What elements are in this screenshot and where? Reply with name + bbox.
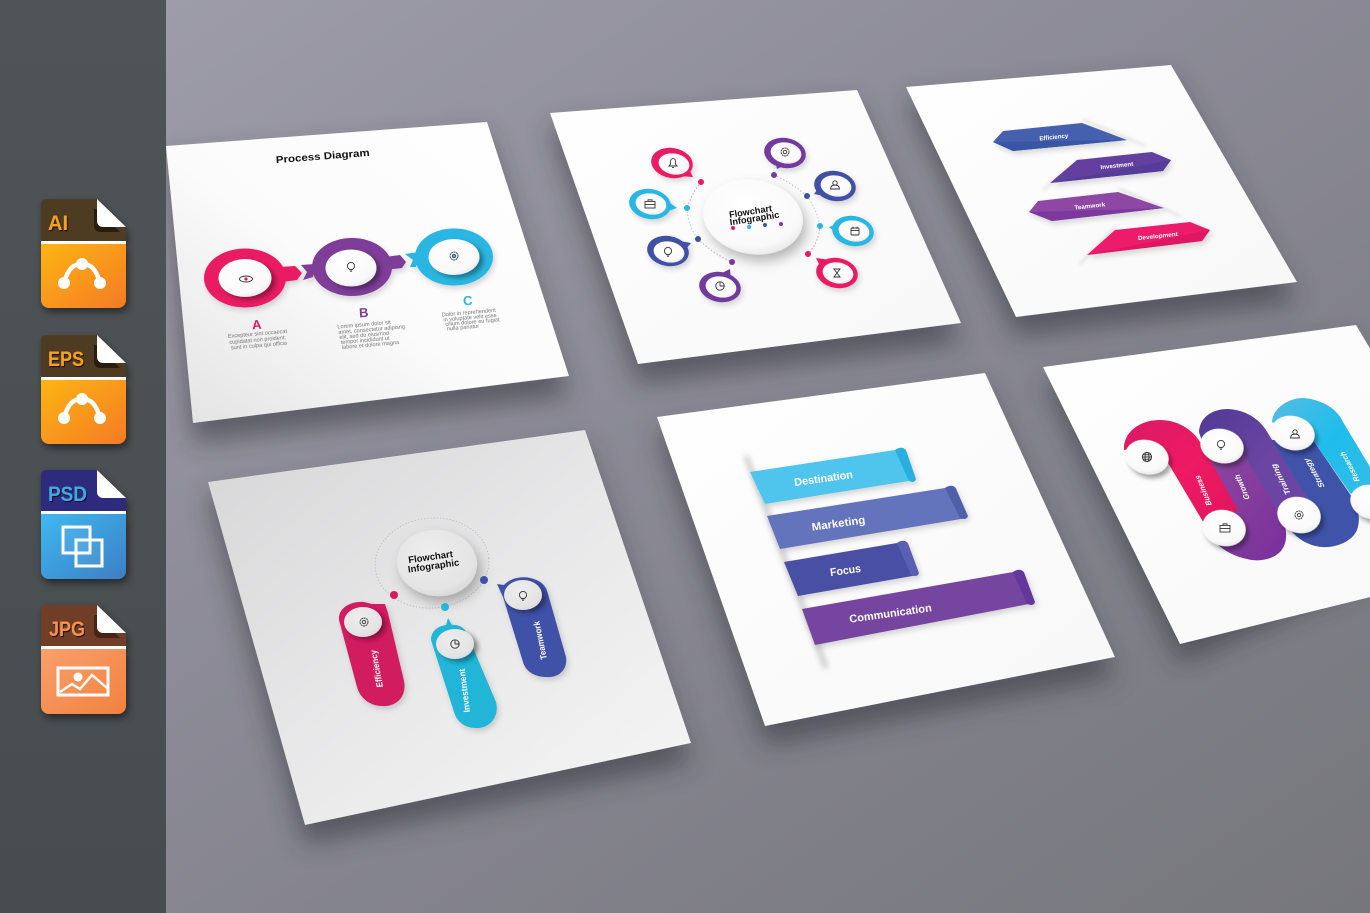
ribbon: investment: Investment [1100, 162, 1134, 171]
icon: JPG file: JPG [49, 618, 85, 641]
icon: PSD file: PSD [48, 483, 87, 506]
text block A [228, 329, 288, 351]
band: business: Business [1192, 474, 1214, 506]
connector dots [684, 172, 823, 265]
ribbon: efficiency: Efficiency [1039, 133, 1069, 143]
button C with gear icon [428, 239, 480, 275]
bubble: pie [697, 269, 743, 305]
band: training [1199, 409, 1312, 530]
band: training: Training [1269, 463, 1293, 495]
fold strip [746, 456, 826, 668]
icon: PSD file [41, 470, 126, 579]
bar: communication [802, 570, 1035, 645]
text block A: sunt in culpa qui officia [231, 341, 288, 351]
button: briefcase [1198, 505, 1250, 551]
band: strategy: Strategy [1301, 457, 1327, 488]
text block B: elit, sed do eiusmod [339, 331, 389, 341]
center dots [731, 222, 783, 230]
center button [394, 526, 480, 600]
fold shadows [1043, 119, 1180, 264]
button: gear [1273, 492, 1325, 538]
text block C [442, 308, 500, 332]
label A: A [251, 317, 263, 332]
button: person [1267, 411, 1319, 455]
bubble: gear [762, 135, 808, 171]
icon: JPG file [41, 605, 126, 714]
band: growth [1200, 442, 1286, 560]
button: globe [1121, 435, 1173, 479]
center button [697, 172, 809, 262]
center title: Infographic [729, 210, 780, 227]
bar: marketing [767, 486, 968, 549]
button: bulb [1196, 424, 1248, 468]
bubble: briefcase [627, 186, 677, 222]
text block A: cupidatat non proident, [229, 335, 287, 346]
ring A with arrow [204, 248, 302, 308]
panel: process diagram card [166, 122, 569, 423]
band: growth: Growth [1232, 474, 1252, 500]
panel: radial flowchart card [550, 90, 961, 364]
ribbon: development: Development [1138, 232, 1178, 242]
heading: process diagram: Process Diagram [276, 148, 370, 166]
panel: folded ribbons card [906, 65, 1297, 317]
card shadows [166, 79, 1370, 845]
ring B with arrows [301, 238, 406, 296]
ribbon: teamwork [1029, 192, 1164, 221]
ring C with arrow [405, 228, 493, 286]
ribbon: investment [1050, 152, 1171, 183]
pill: teamwork [497, 577, 566, 677]
bar: focus: Focus [829, 563, 862, 579]
pill: investment [431, 618, 497, 728]
text block C: Dolor in reprehenderit [442, 308, 497, 318]
pill: efficiency: Efficiency [368, 650, 385, 688]
bar: marketing: Marketing [811, 514, 866, 534]
button A with eye icon [218, 259, 272, 297]
button: partial [1346, 480, 1370, 524]
ribbon: efficiency [993, 123, 1127, 151]
text block C: cillum dolore eu fugiat [445, 317, 500, 328]
button B with bulb icon [326, 250, 376, 286]
text block B [337, 320, 405, 351]
bar: focus [784, 541, 919, 596]
icon: EPS file [41, 335, 126, 444]
text block B: labore et dolore magna [342, 340, 400, 351]
text block C: nulla pariatur [447, 324, 480, 332]
bubble: calendar [829, 213, 876, 249]
panel: snake ribbon card [1043, 325, 1370, 644]
text block B: amet, consectetur adipisng [338, 324, 405, 336]
pill: investment: Investment [457, 668, 472, 713]
bar: destination: Destination [794, 469, 854, 489]
left sidebar [0, 0, 166, 913]
band: research: Research [1338, 451, 1362, 482]
band: strategy [1250, 440, 1359, 547]
label C: C [462, 293, 474, 308]
label B: B [358, 305, 369, 320]
center title: Infographic [407, 557, 460, 576]
bar: destination [750, 448, 916, 504]
text block A: Excepteur sint occaecat [228, 329, 288, 340]
bubble: bell [649, 145, 695, 181]
band: business [1124, 420, 1238, 525]
band: research [1272, 398, 1370, 503]
text block C: in voluptate velit esse [443, 313, 497, 323]
dotted ring [371, 513, 493, 613]
center title: Flowchart [408, 549, 454, 566]
center title [407, 549, 460, 576]
panel: grey flowchart card [208, 430, 691, 825]
bubble: person [812, 168, 858, 204]
icon: EPS file: EPS [48, 348, 84, 371]
bubble: hourglass [814, 255, 860, 291]
text block B: Lorem ipsum dolor sit [337, 320, 391, 330]
text block B: tempor incididunt ut [341, 336, 390, 346]
bar: communication: Communication [849, 602, 933, 626]
connector dots [390, 576, 488, 611]
bubble: bulb [645, 233, 691, 269]
ribbon: development [1087, 222, 1210, 255]
center title: Flowchart [728, 203, 773, 220]
dotted connector arcs [687, 175, 820, 262]
panel: curled bars card [657, 373, 1115, 726]
pill: teamwork: Teamwork [531, 620, 549, 660]
ribbon: teamwork: Teamwork [1074, 202, 1106, 212]
icon: AI file: AI [48, 212, 68, 235]
pill: efficiency [339, 602, 404, 706]
icon: AI file [41, 199, 126, 308]
